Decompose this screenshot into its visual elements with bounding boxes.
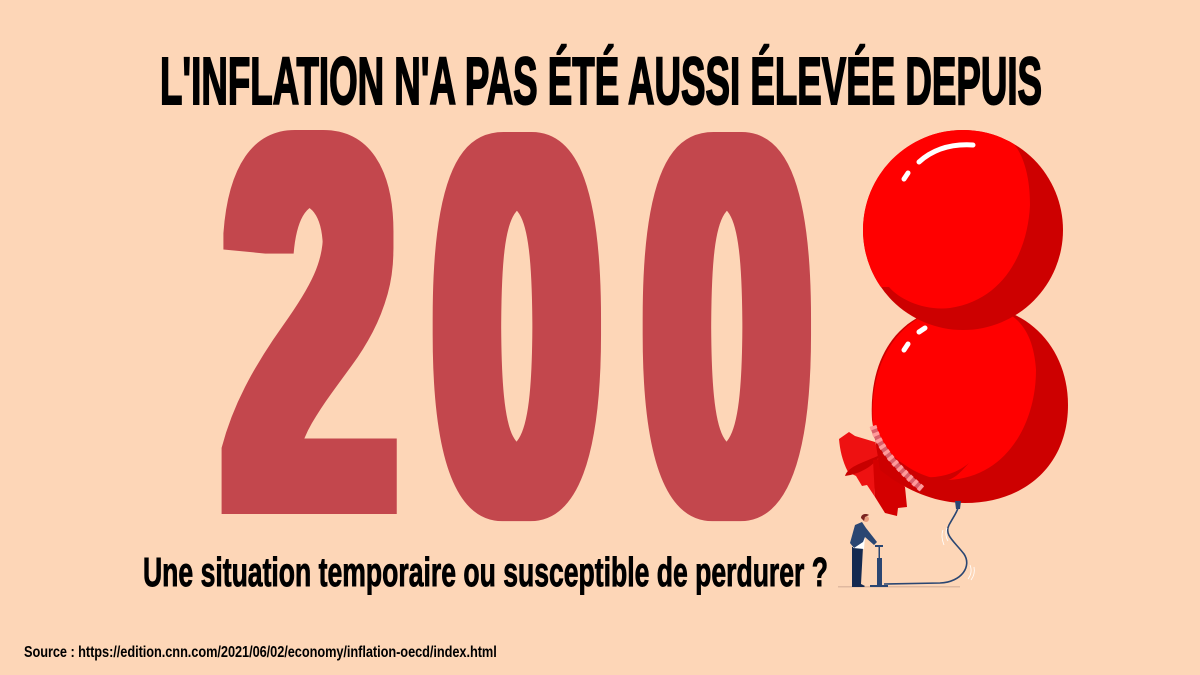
upper balloon bbox=[863, 130, 1063, 330]
ground shadow bbox=[838, 586, 960, 588]
big number 200: 0 bbox=[435, 30, 599, 620]
head bbox=[861, 514, 869, 522]
pump body bbox=[870, 545, 888, 587]
big number 200 bbox=[225, 30, 809, 620]
bow knot of the balloon bbox=[839, 432, 907, 516]
big number 200: 0 bbox=[645, 30, 809, 620]
balloon highlights bbox=[904, 145, 973, 350]
jacket and arm bbox=[850, 522, 877, 548]
legs bbox=[852, 547, 865, 587]
pump hose bbox=[884, 508, 974, 584]
shirt bbox=[853, 537, 865, 549]
source line: Source : https://edition.cnn.com/2021/06/02/economy/inflation-oecd/index.html bbox=[24, 644, 497, 661]
man with pump bbox=[838, 514, 960, 588]
subtitle question: Une situation temporaire ou susceptible de perdurer ? bbox=[143, 549, 828, 595]
lower balloon bbox=[872, 305, 1068, 503]
valve bbox=[955, 501, 961, 509]
balloon forming digit 8 bbox=[839, 110, 1068, 516]
big number 200: 2 bbox=[225, 30, 395, 619]
rope tie bbox=[873, 426, 922, 489]
